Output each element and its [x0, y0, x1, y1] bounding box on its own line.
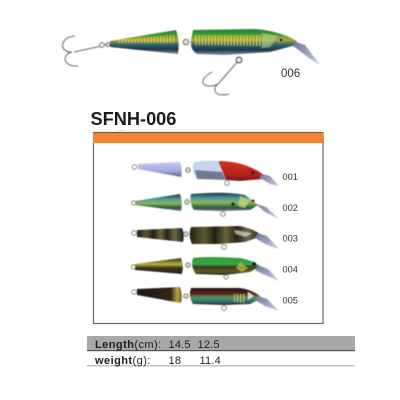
row: weight: [87, 355, 355, 367]
body section: [191, 29, 297, 55]
belly treble hook: [203, 60, 239, 95]
lure 002: [132, 193, 279, 219]
stray text fragment: ...: [118, 127, 125, 133]
orange header bar: [93, 132, 323, 143]
row: length: [87, 336, 355, 351]
panel: colour variants: [93, 132, 323, 324]
lure 005: [132, 287, 279, 311]
row: length: Length(cm):: [95, 339, 162, 351]
lure 004: [132, 257, 279, 281]
row: length: 12.5: [198, 339, 220, 351]
row: length: 14.5: [168, 339, 191, 351]
lure 001: [132, 161, 279, 186]
icon: hero lure 006: [63, 29, 320, 95]
spec table: [87, 336, 355, 367]
lure 003: [132, 226, 279, 249]
lip: [293, 42, 320, 65]
row: weight: weight(g):: [94, 355, 151, 367]
row: weight: 18: [168, 355, 181, 367]
tail section: [110, 30, 179, 54]
connector: [183, 39, 189, 45]
label: 005: 005: [282, 296, 298, 306]
label: 004: 004: [282, 264, 298, 274]
label: 006: 006: [281, 68, 300, 80]
row: weight: 11.4: [200, 355, 221, 367]
label: 003: 003: [282, 234, 298, 244]
label: 001: 001: [282, 172, 298, 182]
title: SFNH-006: [90, 109, 176, 129]
label: 002: 002: [282, 203, 298, 213]
tail treble hook: [63, 36, 106, 66]
